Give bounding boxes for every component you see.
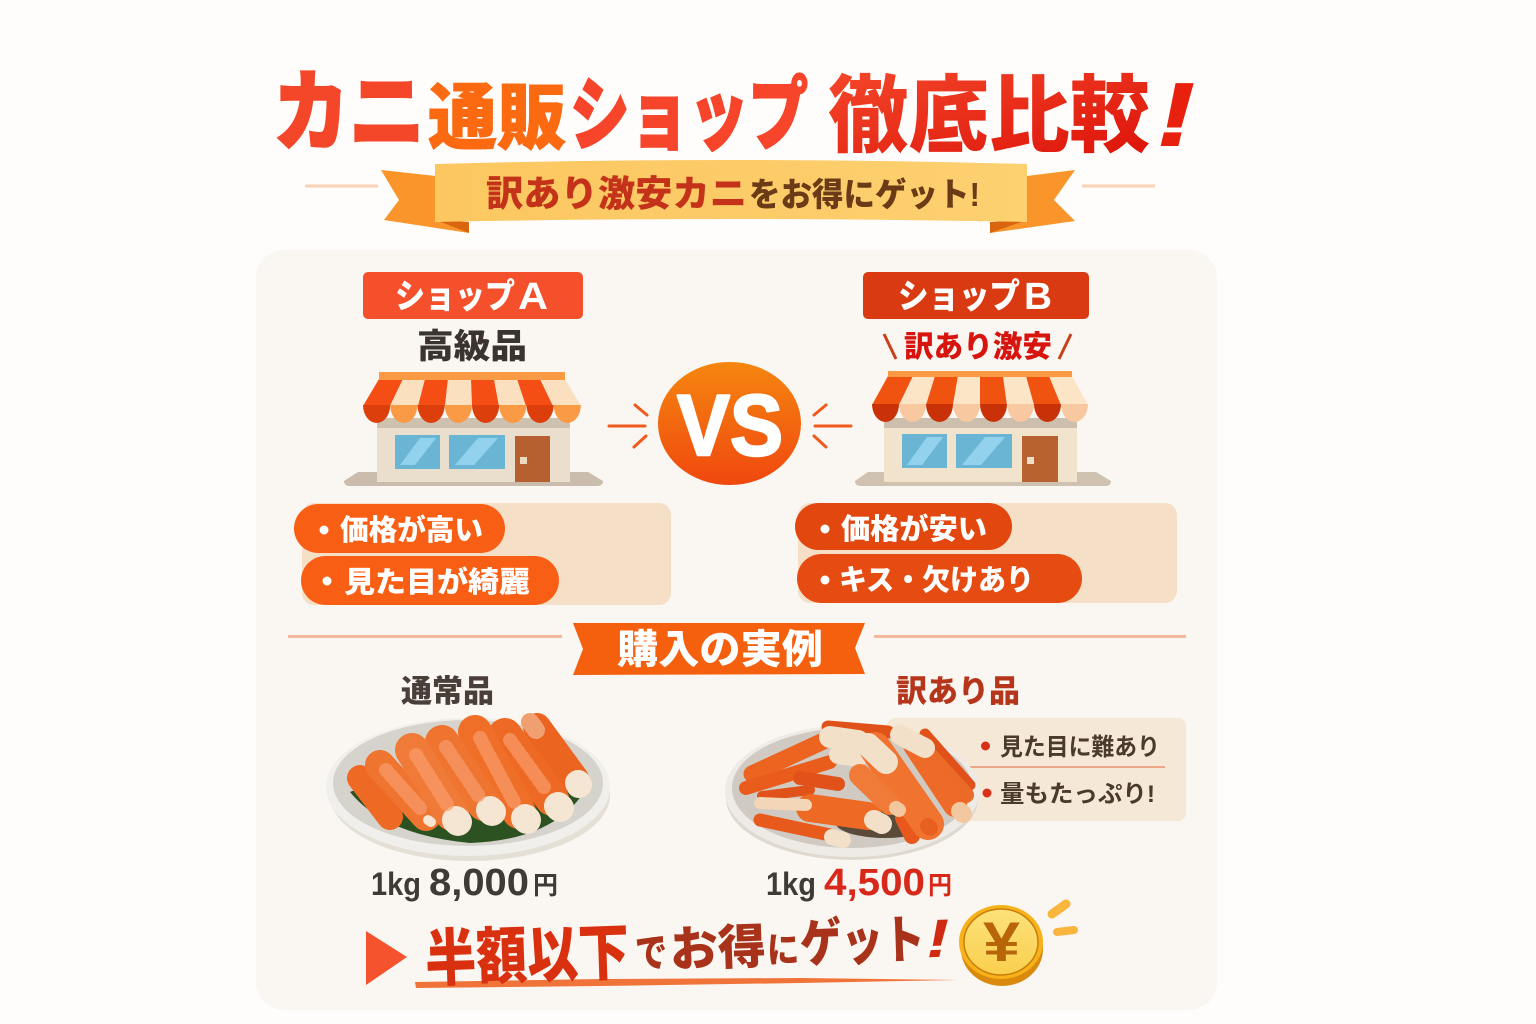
conclusion text: ゲット bbox=[799, 911, 926, 974]
price: discount bbox=[766, 862, 952, 904]
pill: scratches bbox=[797, 554, 1082, 603]
label: regular item: 通常品 bbox=[401, 674, 494, 709]
label: discount item: 訳あり品 bbox=[896, 674, 1020, 709]
conclusion text: 半額以下 bbox=[424, 919, 630, 995]
VS badge: VS bbox=[677, 378, 783, 474]
subtitle ribbon: 訳あり激安カニ bbox=[486, 173, 747, 214]
pill: looks good: 見た目が綺麗 bbox=[344, 565, 530, 599]
subtitle ribbon bbox=[305, 160, 1155, 233]
VS badge bbox=[609, 362, 851, 485]
price: regular bbox=[371, 862, 558, 904]
pill: scratches: キス・欠けあり bbox=[839, 563, 1034, 597]
price: regular: 1kg bbox=[371, 866, 421, 902]
image: regular crab plate bbox=[326, 718, 610, 861]
icon: yen coin: ¥ bbox=[983, 910, 1020, 973]
shop B label: ショップ bbox=[898, 278, 1020, 316]
conclusion text: お得 bbox=[669, 921, 767, 977]
pill: high price: 価格が高い bbox=[340, 513, 483, 547]
shop A label bbox=[363, 272, 583, 319]
pill: low price bbox=[795, 503, 1012, 550]
price: discount: 1kg bbox=[766, 866, 816, 902]
subtitle ribbon: をお得にゲット! bbox=[749, 176, 980, 213]
price: discount: 4,500 bbox=[824, 862, 925, 904]
section heading: purchase example bbox=[288, 623, 1186, 675]
conclusion text: ! bbox=[925, 909, 951, 969]
title: ショップ bbox=[570, 71, 808, 160]
panel: shop B points bbox=[795, 503, 1177, 603]
shop A label: A bbox=[518, 276, 548, 318]
shop B label: B bbox=[1024, 276, 1052, 318]
arrow: conclusion marker bbox=[366, 931, 407, 985]
shop A label: ショップ bbox=[395, 278, 515, 316]
icon: yen coin bbox=[959, 904, 1074, 986]
pill: looks good bbox=[301, 556, 559, 605]
price: discount: 円 bbox=[928, 872, 952, 900]
title: 通販 bbox=[428, 79, 566, 159]
main panel bbox=[256, 250, 1217, 1010]
panel: shop A points bbox=[294, 503, 671, 605]
section heading: purchase example: 購入の実例 bbox=[617, 628, 823, 672]
title: 徹底比較 bbox=[828, 69, 1150, 163]
price: regular: 8,000 bbox=[429, 862, 529, 904]
callout: discount notes: 見た目に難あり bbox=[1000, 734, 1160, 761]
callout: discount notes bbox=[887, 718, 1186, 821]
title bbox=[273, 63, 1194, 164]
icon: shop B store bbox=[855, 371, 1111, 486]
shop B tag: 訳あり激安 bbox=[904, 331, 1052, 364]
pill: high price bbox=[294, 504, 505, 553]
pill: low price: 価格が安い bbox=[841, 512, 987, 546]
underline stroke bbox=[415, 978, 958, 988]
title: ! bbox=[1158, 65, 1194, 164]
conclusion text: に bbox=[766, 929, 800, 971]
conclusion text: で bbox=[634, 931, 668, 977]
image: discount crab plate bbox=[725, 725, 979, 860]
price: regular: 円 bbox=[533, 872, 558, 900]
callout: discount notes: 量もたっぷり! bbox=[1000, 781, 1155, 808]
icon: shop A store bbox=[344, 372, 603, 486]
conclusion text bbox=[424, 908, 951, 995]
shop A tag: 高級品 bbox=[417, 328, 527, 366]
shop B label bbox=[863, 272, 1089, 319]
title: カニ bbox=[273, 63, 425, 162]
